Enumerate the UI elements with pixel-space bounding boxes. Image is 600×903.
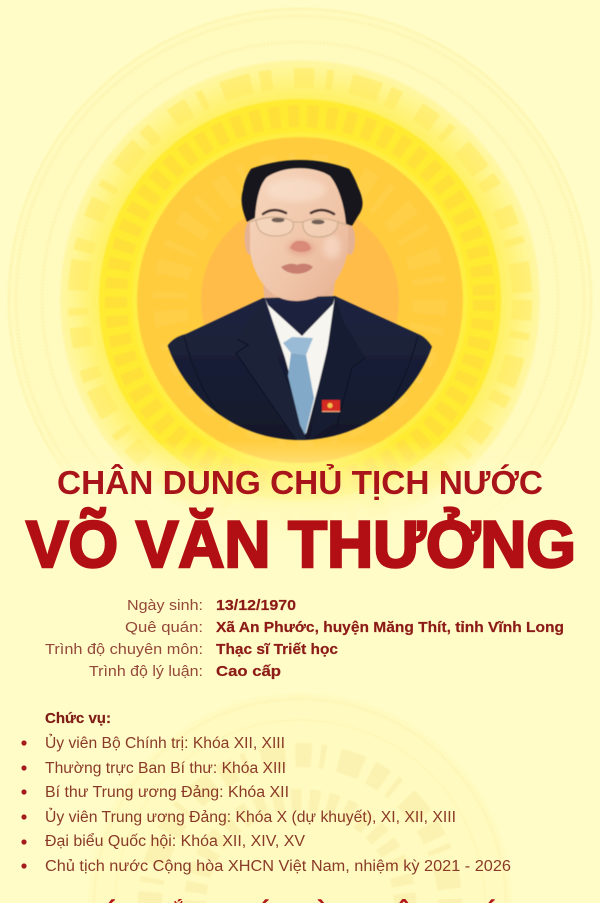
ears (244, 221, 355, 255)
cheek highlights (266, 178, 341, 259)
nose (290, 241, 311, 252)
tie (283, 337, 314, 435)
political theory level: Cao cấp (216, 663, 281, 680)
mouth (281, 264, 313, 274)
face (250, 166, 348, 301)
right lapel (326, 297, 364, 398)
name headline: VÕ VĂN THƯỞNG (26, 507, 576, 581)
lower faint drum emblem (88, 693, 512, 903)
position 4: Ủy viên Trung ương Đảng: Khóa X (dự khuyết), XI, XII, XIII (45, 808, 456, 826)
fade of the emblem behind the title (0, 440, 600, 600)
birth date: Ngày sinh: (127, 597, 203, 614)
professional qualification: Thạc sĩ Triết học (216, 641, 338, 658)
positions list (21, 734, 511, 875)
eyes (272, 218, 324, 224)
hometown: Quê quán: (125, 619, 203, 636)
left lapel (238, 354, 306, 440)
birth date (127, 597, 296, 614)
position 2: Thường trực Ban Bí thư: Khóa XIII (45, 760, 286, 777)
shirt (265, 297, 335, 434)
positions heading: Chức vụ: (45, 710, 111, 727)
political theory level (89, 663, 281, 680)
lapel pin (322, 400, 340, 412)
hair (240, 159, 364, 226)
personal details block (45, 597, 564, 680)
position 6: Chủ tịch nước Cộng hòa XHCN Việt Nam, nhiệm kỳ 2021 - 2026 (45, 858, 511, 875)
birth date: 13/12/1970 (216, 597, 296, 614)
suit seams (184, 336, 418, 440)
eyebrows (263, 210, 334, 214)
professional qualification: Trình độ chuyên môn: (45, 641, 203, 658)
suit (165, 296, 436, 445)
neck (262, 282, 336, 299)
professional qualification (45, 641, 338, 658)
position 1: Ủy viên Bộ Chính trị: Khóa XII, XIII (45, 734, 285, 752)
glasses (250, 217, 347, 237)
title line: CHÂN DUNG CHỦ TỊCH NƯỚC (57, 464, 543, 501)
portrait photo (165, 143, 436, 445)
hometown: Xã An Phước, huyện Măng Thít, tỉnh Vĩnh Long (216, 619, 564, 636)
position 5: Đại biểu Quốc hội: Khóa XII, XIV, XV (45, 833, 306, 850)
position 3: Bí thư Trung ương Đảng: Khóa XII (45, 784, 289, 801)
political theory level: Trình độ lý luận: (89, 663, 203, 680)
sun emblem rings (7, 7, 593, 593)
